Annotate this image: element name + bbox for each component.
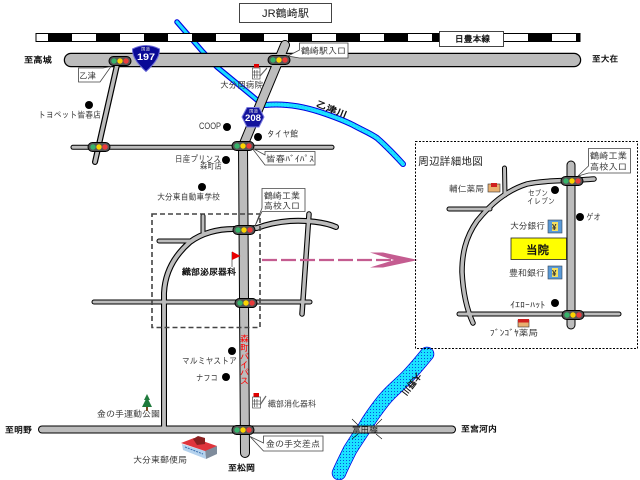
- callout: 鶴崎駅入口: 鶴崎駅入口: [301, 46, 346, 56]
- detail area dashed frame: [152, 214, 260, 328]
- detail map labels: 豊和銀行: [509, 268, 545, 278]
- landmark labels: マルミヤストア: [182, 356, 237, 366]
- icon: route 208 shield: [242, 108, 264, 127]
- panel: detail map contents: [418, 148, 630, 338]
- station label: JR鶴崎駅: [240, 4, 332, 22]
- detail map markers: [551, 186, 584, 307]
- icon: route 208 shield: 国道: [249, 108, 258, 114]
- road name: 森町バイパス: バ: [240, 352, 249, 362]
- river label: 大野川: 大野川: [399, 371, 423, 397]
- landmark labels: ナフコ: [196, 373, 218, 383]
- icon: bank 大分銀行: ¥: [552, 223, 557, 232]
- icon: post office building: [181, 436, 217, 459]
- callout: 鶴崎工業高校入口: 鶴崎工業: [264, 191, 300, 201]
- road name: 森町バイパス: パ: [240, 368, 249, 378]
- railway label: 日豊本線: [440, 32, 504, 46]
- clinic flag and name: 織部泌尿器科: [181, 252, 240, 277]
- landmark labels: タイヤ館: [267, 129, 298, 139]
- detail map labels: ﾌﾞﾝｺﾞﾔ薬局: [490, 328, 538, 338]
- road name: 森町バイパス: 町: [240, 343, 249, 353]
- callout: 皆春バイパス: 皆春ﾊﾞｲﾊﾟｽ: [266, 154, 315, 164]
- river: 乙津川: [265, 104, 403, 164]
- station label: JR鶴崎駅: JR鶴崎駅: [262, 7, 309, 20]
- clinic marker: 当院: 当院: [526, 243, 549, 257]
- railway: 日豊本線: [36, 33, 580, 42]
- road name: 森町バイパス: [240, 334, 249, 386]
- road name: 森町バイパス: 森: [240, 334, 249, 344]
- landmark labels: 大分岡病院: [220, 80, 263, 90]
- detail map labels: 輔仁薬局: [449, 184, 484, 194]
- icon: bank 豊和銀行: [548, 266, 562, 279]
- callout: 鶴崎工業高校入口: 高校入口: [264, 201, 300, 211]
- icon: pharmacy ブンゴヤ薬局: [518, 319, 529, 327]
- icon: bank 大分銀行: [548, 220, 562, 233]
- landmark markers: [85, 101, 262, 381]
- callout: 鶴崎工業高校入口: 鶴崎工業: [590, 151, 627, 161]
- arrow to detail map: [262, 252, 418, 268]
- landmark labels: COOP: [199, 121, 221, 131]
- river: upper tributary: [177, 22, 257, 100]
- direction labels: 至高城: [24, 55, 52, 65]
- icon: pharmacy 輔仁薬局: [488, 183, 500, 192]
- detail map labels: ｲｴﾛｰﾊｯﾄ: [510, 300, 545, 310]
- direction labels: 至松岡: [228, 463, 255, 473]
- callout: 鶴崎駅入口: [288, 43, 348, 58]
- detail map labels: ゲオ: [586, 212, 601, 222]
- river: 大野川: [339, 354, 427, 473]
- callout: 皆春バイパス: [252, 148, 315, 165]
- icon: bank 豊和銀行: ¥: [552, 269, 557, 278]
- road name: 森町バイパス: イ: [240, 360, 249, 370]
- landmark labels: 森町店: [200, 161, 222, 171]
- icon: route 197 shield: [132, 46, 160, 72]
- callout: 乙津: 乙津: [79, 71, 96, 81]
- icon: route 197 shield: 国道: [141, 46, 150, 52]
- icon: clinic building 織部消化器科: [252, 393, 266, 408]
- detail map title: 周辺詳細地図: [418, 155, 483, 168]
- bridge: 富田橋: [352, 419, 382, 439]
- bridge: 富田橋: 富田橋: [352, 425, 378, 435]
- river label: 乙津川: 乙津川: [314, 99, 349, 120]
- landmark labels: [38, 80, 316, 465]
- callout: 金の手交差点: 金の手交差点: [266, 439, 320, 449]
- icon: park tree: [142, 394, 152, 411]
- landmark labels: 金の手運動公園: [97, 409, 160, 419]
- landmark labels: 日産プリンス: [175, 154, 221, 164]
- traffic signals: [88, 56, 584, 434]
- railway label: 日豊本線: 日豊本線: [455, 34, 491, 44]
- callout: 乙津: [78, 66, 111, 82]
- direction labels: 至明野: [5, 425, 32, 435]
- callout: 鶴崎工業高校入口: 高校入口: [590, 162, 627, 172]
- landmark labels: 織部消化器科: [268, 399, 316, 409]
- icon: route 197 shield: 197: [137, 52, 155, 62]
- detail map labels: [449, 184, 601, 338]
- direction labels: 至宮河内: [461, 424, 497, 434]
- detail map labels: イレブン: [527, 197, 555, 206]
- callout: 金の手交差点: [250, 436, 323, 451]
- icon: route 208 shield: 208: [245, 113, 261, 123]
- direction labels: 至大在: [592, 54, 618, 64]
- detail map labels: 大分銀行: [510, 221, 545, 231]
- road name: 森町バイパス: ス: [240, 376, 249, 386]
- callout: 鶴崎工業高校入口: [578, 148, 630, 176]
- detail map labels: セブン: [528, 189, 548, 198]
- landmark labels: 大分東郵便局: [133, 455, 187, 465]
- road network: [42, 45, 619, 453]
- clinic marker: 当院: [511, 238, 566, 260]
- callout: 鶴崎工業高校入口: [255, 188, 305, 226]
- landmark labels: 大分東自動車学校: [157, 192, 220, 202]
- icon: hospital building 大分岡病院: [252, 64, 267, 79]
- landmark labels: トヨペット皆春店: [38, 110, 101, 120]
- clinic flag and name: 織部泌尿器科: 織部泌尿器科: [181, 267, 236, 277]
- panel: detail map frame: [416, 142, 638, 348]
